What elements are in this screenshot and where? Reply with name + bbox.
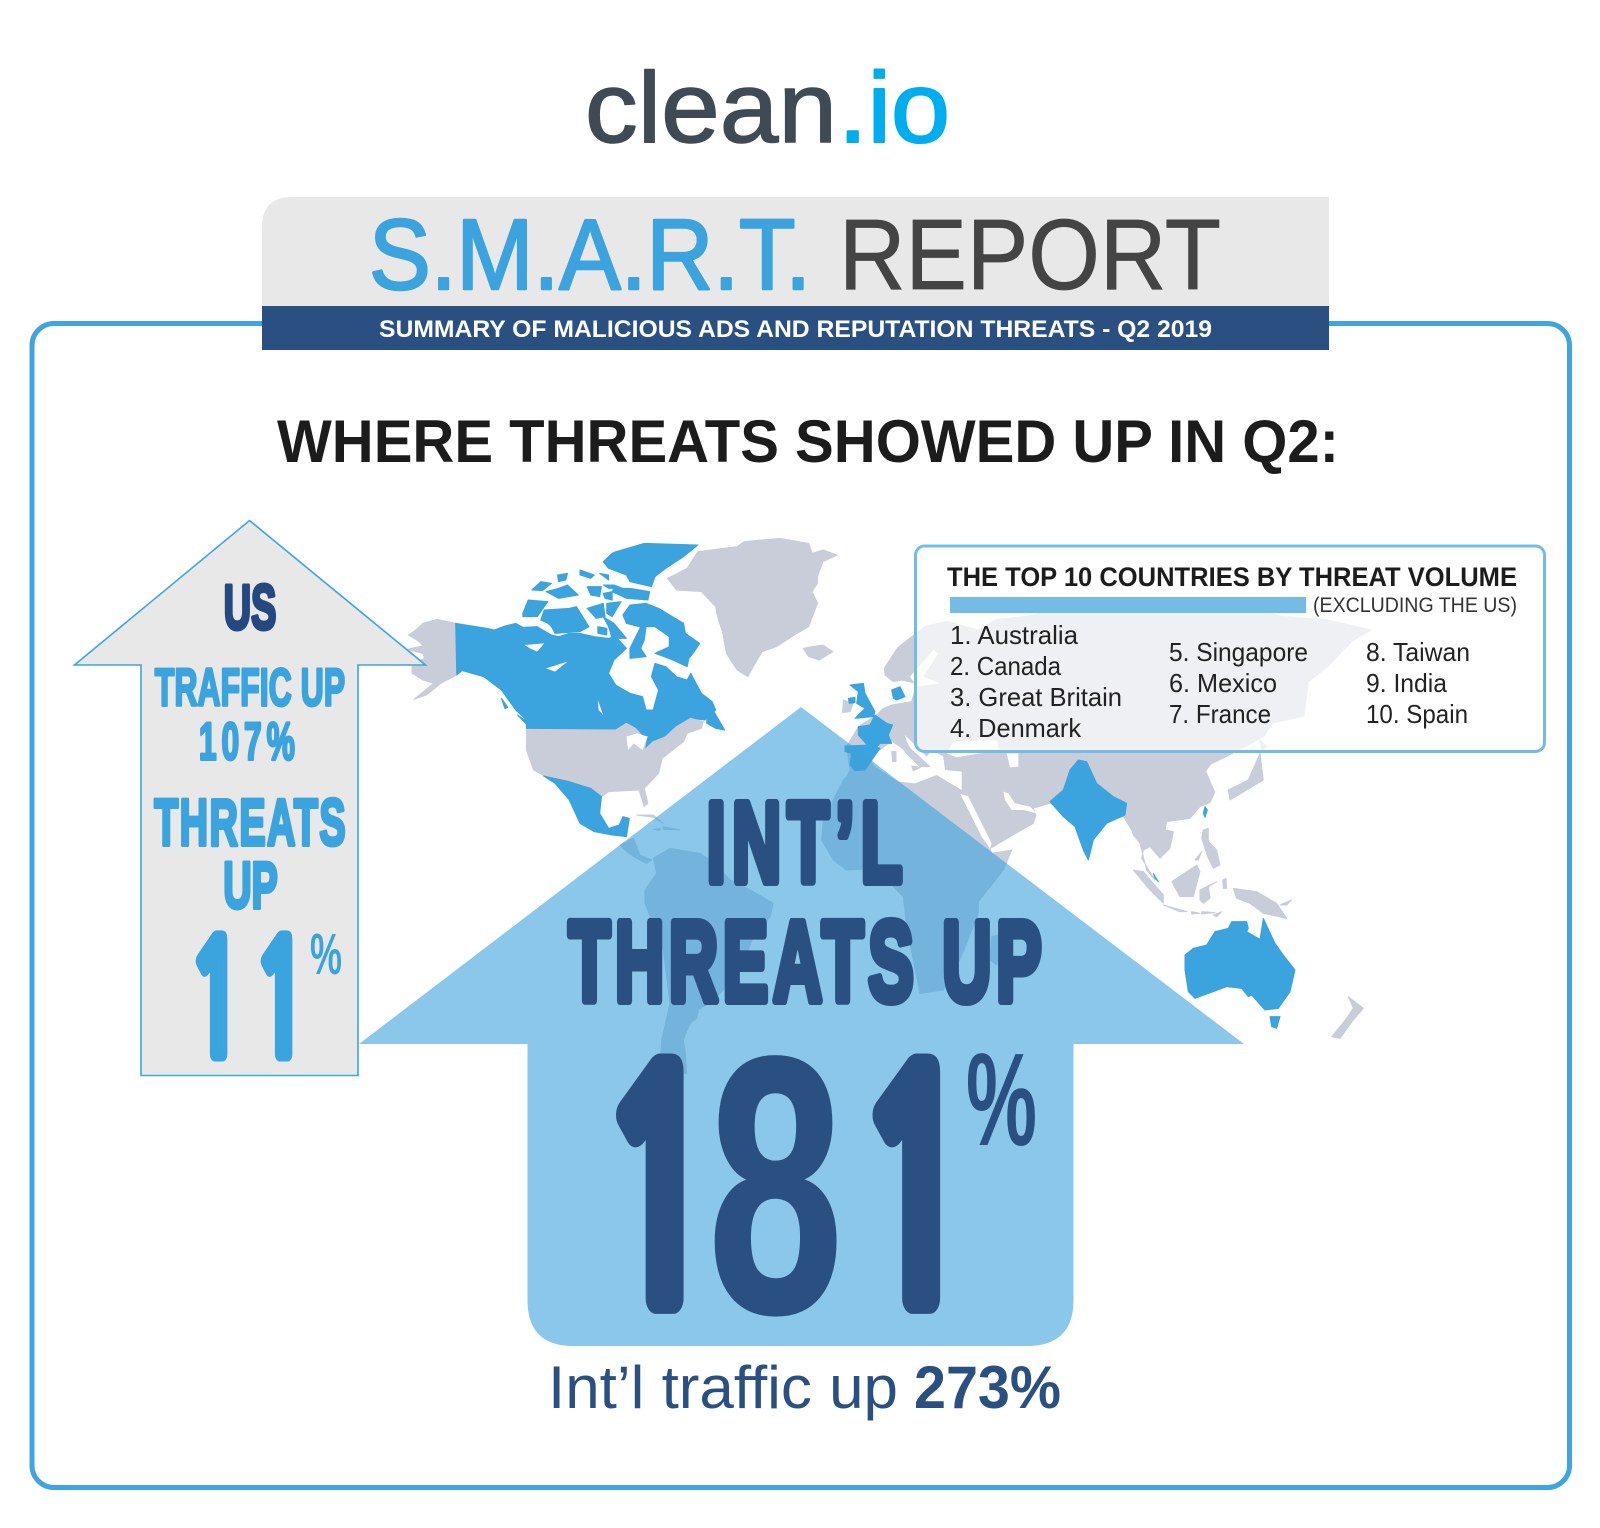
map: Italy and islands	[892, 737, 930, 771]
legend title: THE TOP 10 COUNTRIES BY THREAT VOLUME	[947, 562, 1517, 592]
map: USA	[526, 718, 703, 807]
figure: 181%: 1	[598, 1040, 722, 1348]
map: Taiwan and Singapore	[1153, 807, 1207, 882]
title: S.M.A.R.T. REPORT: REPORT	[839, 199, 1221, 311]
list: column 1: 4. Denmark	[950, 713, 1082, 743]
list: column 3: 10. Spain	[1366, 699, 1468, 729]
list: column 1: 2. Canada	[950, 651, 1061, 681]
panel: top 10 countries	[916, 546, 1544, 752]
list: column 3: 9. India	[1366, 668, 1448, 698]
label: threats up: THREATS	[154, 787, 346, 860]
map: Black Sea, Caspian, Baltic	[910, 650, 1018, 767]
legend bar	[950, 597, 1306, 613]
label: traffic up: TRAFFIC UP	[155, 658, 345, 718]
caption: international traffic: 273%	[914, 1354, 1061, 1421]
label: INT'L: INT’L	[707, 780, 902, 906]
list: column 2: 6. Mexico	[1169, 668, 1277, 698]
map: Ireland	[843, 700, 853, 713]
map: Mexico	[544, 776, 629, 837]
figure: 11%: 1	[251, 922, 311, 1080]
panel: report banner	[262, 197, 1329, 350]
list: column 2	[1169, 637, 1308, 729]
map: Great Britain	[848, 683, 875, 718]
map: Madagascar	[990, 933, 1003, 965]
caption: international traffic	[548, 1354, 1061, 1421]
legend note: (EXCLUDING THE US)	[1313, 594, 1517, 617]
map: Southeast Asia and New Zealand	[1133, 807, 1363, 1038]
map: Great Lakes	[626, 733, 648, 750]
map: Australia	[1185, 918, 1295, 1028]
figure: 11%: 1	[186, 922, 246, 1080]
list: column 2: 7. France	[1169, 699, 1271, 729]
map: Greenland	[667, 538, 837, 677]
title: S.M.A.R.T. REPORT	[369, 199, 1221, 311]
title: S.M.A.R.T. REPORT: S.M.A.R.T.	[369, 199, 811, 311]
figure: 11%: %	[310, 922, 342, 987]
list: column 2: 5. Singapore	[1169, 637, 1308, 667]
arrow: US	[74, 520, 426, 1080]
map: Alaska	[407, 619, 457, 699]
label: traffic up	[155, 658, 345, 772]
label: threats up: UP	[223, 850, 278, 923]
caption: international traffic: Int’l traffic up	[548, 1354, 898, 1421]
map: Canadian lakes	[525, 643, 603, 715]
subtitle: SUMMARY OF MALICIOUS ADS AND REPUTATION THREATS - Q2 2019	[379, 316, 1212, 343]
panel: main frame	[32, 324, 1570, 1488]
list: column 1	[950, 620, 1122, 743]
figure: 181%	[598, 982, 1037, 1390]
label: traffic up: 107%	[199, 712, 295, 772]
arrow: international	[359, 707, 1244, 1390]
figure: 11%	[186, 922, 342, 1080]
label: US: US	[224, 573, 276, 644]
logo: .io	[838, 52, 950, 164]
world map	[407, 538, 1371, 1073]
map: Iceland	[803, 645, 833, 660]
map: India	[1050, 760, 1127, 860]
list: column 3	[1366, 637, 1470, 729]
list: column 3: 8. Taiwan	[1366, 637, 1470, 667]
map: Eurasia and Africa	[822, 602, 1371, 993]
label: THREATS UP: THREATS UP	[569, 899, 1042, 1025]
map: North America	[407, 538, 837, 837]
label: threats up	[154, 787, 346, 923]
map: Japan	[1228, 740, 1267, 800]
figure: 181%: %	[966, 1026, 1037, 1173]
logo: clean	[585, 52, 837, 164]
map: Red Sea and Persian Gulf	[960, 792, 1037, 848]
map: Denmark	[892, 687, 905, 700]
logo	[585, 52, 950, 164]
figure: 181%: 1	[854, 1040, 979, 1348]
map: Canada	[456, 623, 716, 750]
map: Canadian islands	[501, 543, 725, 730]
heading: WHERE THREATS SHOWED UP IN Q2:	[277, 408, 1339, 475]
figure: 181%: 8	[708, 982, 843, 1390]
list: column 1: 1. Australia	[950, 620, 1079, 650]
list: column 1: 3. Great Britain	[950, 682, 1122, 712]
map: Central and South America	[620, 815, 773, 1073]
map: Mediterranean	[872, 735, 962, 790]
map: Spain	[845, 745, 880, 771]
map: France	[858, 715, 893, 752]
